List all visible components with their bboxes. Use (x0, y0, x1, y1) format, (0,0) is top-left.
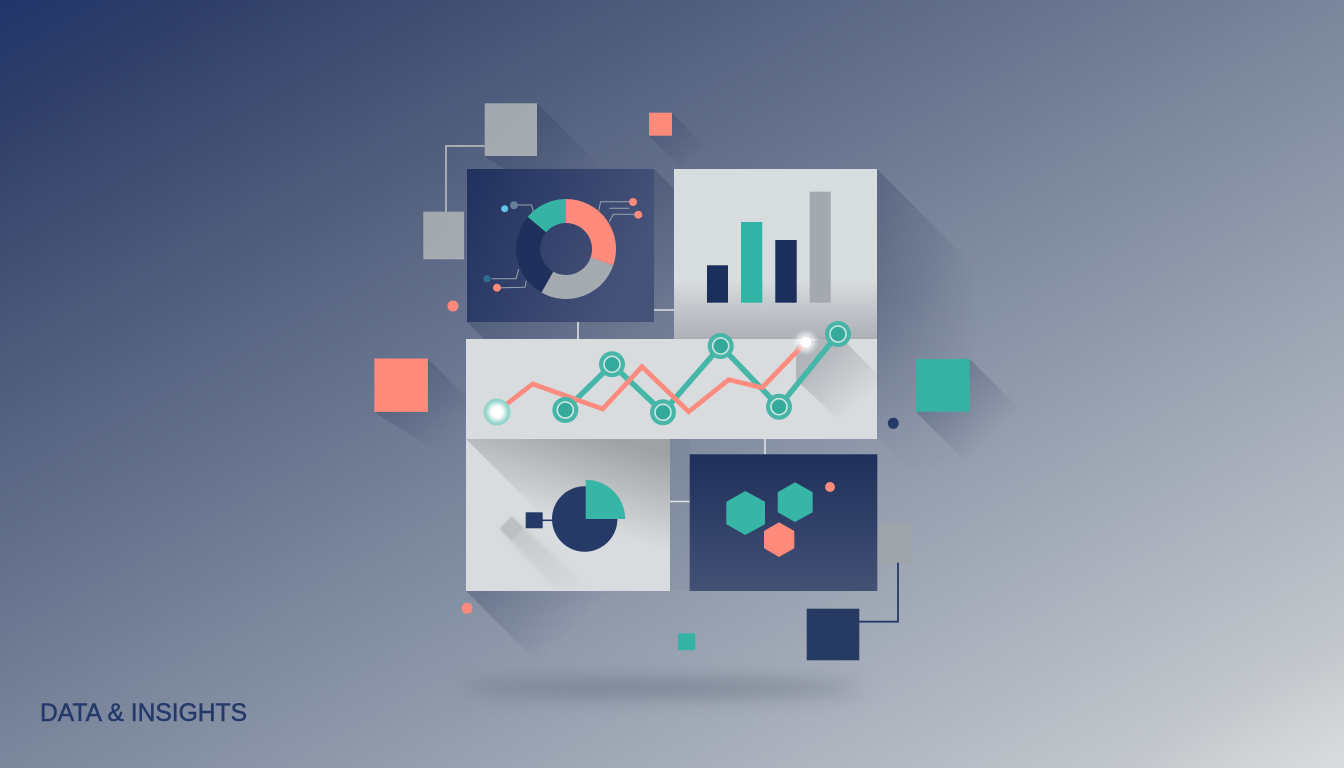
panel: line chart (466, 321, 877, 439)
dot: coral in panel (825, 482, 835, 492)
dot: navy right (888, 418, 899, 429)
teal data nodes (552, 321, 851, 425)
end node with glow (796, 332, 816, 352)
dot: coral left (448, 300, 458, 312)
pie chart: teal wedge (586, 480, 625, 519)
icon shadow trail (500, 517, 590, 588)
line chart: teal series (565, 334, 838, 412)
dot: coral bottom left (462, 603, 472, 614)
corner highlight (1144, 648, 1344, 768)
hexagon: coral (764, 522, 794, 557)
connector: donut panel to bar panel (654, 309, 675, 311)
pie connector (542, 519, 553, 521)
square: small grey (423, 212, 464, 259)
connector: grey squares (446, 146, 485, 212)
connector: navy (859, 563, 898, 622)
square: large teal (916, 359, 970, 412)
square: small teal (678, 633, 695, 650)
icon: navy square (526, 512, 543, 528)
square: small coral (649, 113, 672, 136)
hexagon: teal left (726, 491, 765, 535)
hexagon: teal right (778, 482, 813, 522)
start node with glow (484, 398, 510, 426)
connector: donut panel to line panel (577, 322, 579, 340)
panel: bar chart (674, 169, 877, 439)
donut leader lines and dots (483, 198, 642, 292)
panel: pie chart (466, 439, 670, 591)
connector: line panel to hexagon panel (764, 439, 766, 455)
title: data and insights: DATA & INSIGHTS (40, 699, 247, 727)
bar chart (707, 192, 831, 303)
ground shadow (460, 681, 860, 695)
pie chart: navy circle (552, 486, 617, 552)
square: large coral (374, 358, 428, 412)
square: grey right (879, 523, 912, 563)
icon: grey diamond (500, 516, 524, 541)
connector: pie panel to hexagon panel (669, 500, 690, 502)
panel: donut chart (467, 169, 654, 322)
donut chart (516, 199, 616, 299)
panel: hexagons (690, 454, 877, 591)
line chart: coral series (497, 342, 806, 412)
long diagonal shadows (374, 104, 1006, 644)
square: large grey (485, 103, 537, 156)
square: navy (807, 609, 859, 660)
